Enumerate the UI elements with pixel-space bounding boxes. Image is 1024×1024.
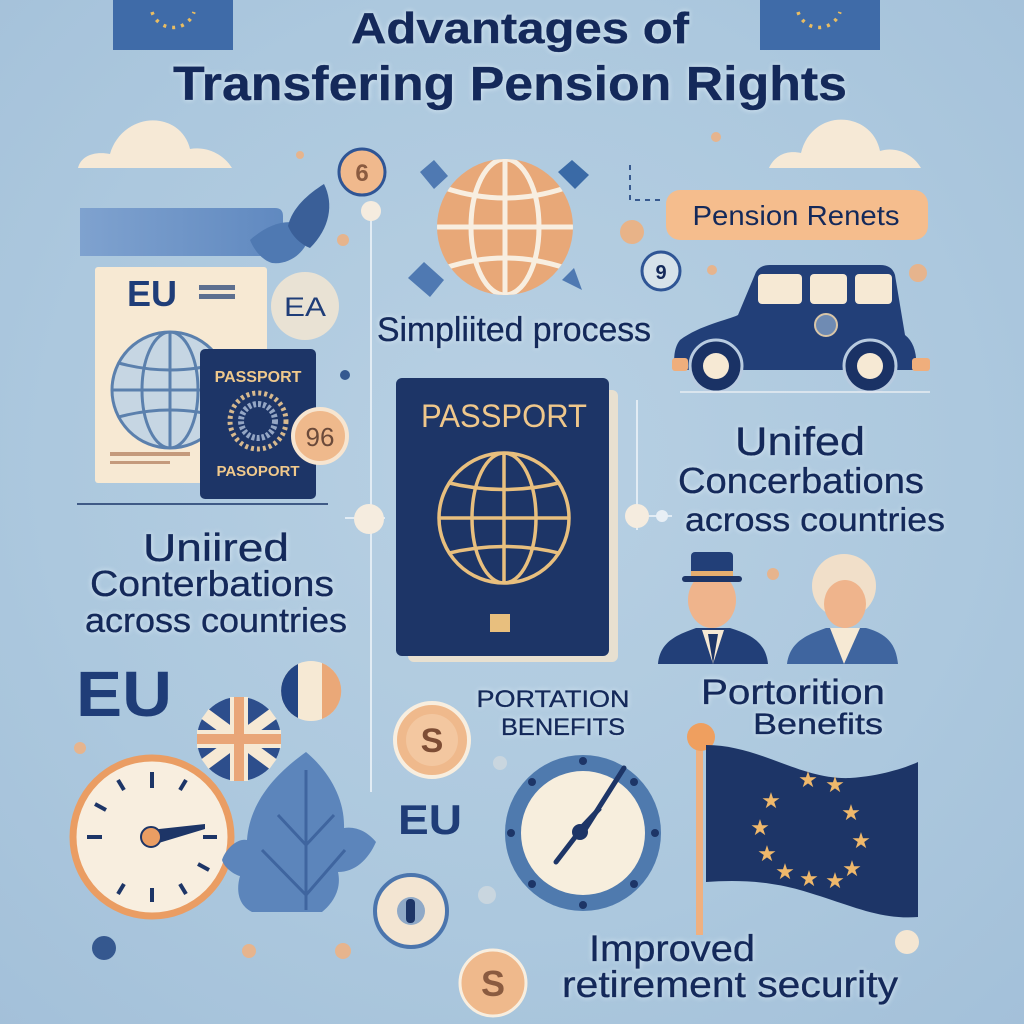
text: unified contributions right (678, 420, 945, 538)
small passport (200, 349, 316, 499)
icon: maple leaf (222, 752, 376, 912)
icon: central globe (435, 155, 575, 300)
leaf decoration (250, 184, 329, 263)
icon: clock left (73, 758, 231, 916)
coin: 96: 96 (306, 422, 334, 452)
dotted path (630, 165, 665, 200)
flag: top right (760, 0, 880, 50)
text: portation benefits: BENEFITS (501, 714, 625, 741)
text: simplified process: Simpliited process (377, 311, 651, 349)
button: pension benefits: Pension Renets (692, 200, 900, 231)
cloud: right (769, 120, 921, 168)
text: portorition benefits: Portorition (701, 673, 885, 712)
coin small (620, 220, 644, 244)
man in hat (658, 552, 768, 664)
icon: UK flag (197, 697, 281, 781)
icon: EU flag with pole: ★ (841, 800, 861, 825)
text: unified contributions left: Uniired (143, 527, 289, 570)
icon: EU flag with pole: ★ (825, 868, 845, 893)
decorative small marks (74, 132, 927, 959)
icon: clock centre (505, 755, 661, 911)
icon: EU flag with pole: ★ (799, 866, 819, 891)
cloud: left (78, 120, 232, 168)
icon: EU flag with pole (687, 723, 918, 935)
text: improved retirement security: retirement security (562, 964, 899, 1005)
icon: car (672, 265, 930, 392)
coin: top centre (339, 149, 385, 195)
icon: EU flag with pole: ★ (757, 841, 777, 866)
icon: EU flag with pole: ★ (825, 772, 845, 797)
small passport: PASSPORT (215, 369, 302, 386)
text: improved retirement security (562, 928, 899, 1005)
document header banner (80, 208, 283, 256)
title: Advantages of (351, 4, 689, 53)
panel: central passport (396, 378, 618, 662)
panel: EU document (77, 184, 347, 504)
small passport: PASOPORT (216, 463, 300, 480)
text: unified contributions left: across countries (85, 602, 347, 640)
text: portation benefits: PORTATION (476, 686, 630, 713)
wheels (690, 340, 896, 392)
icon: EU flag with pole: ★ (750, 815, 770, 840)
icon: EU flag with pole: ★ (842, 856, 862, 881)
text: portorition benefits (701, 673, 885, 741)
node dots on connector (354, 201, 668, 534)
button: pension benefits (666, 190, 928, 240)
text: portation benefits (476, 686, 630, 741)
label: EU large: EU (76, 658, 172, 730)
chip (490, 614, 510, 632)
passport label: PASSPORT (421, 398, 587, 434)
icon: tricolor badge (281, 661, 341, 721)
text: unified contributions right: across countries (685, 501, 945, 538)
coin outline (642, 252, 680, 290)
EU label: EU (127, 273, 177, 314)
connector lines (345, 215, 672, 792)
icon: EU flag with pole: ★ (775, 859, 795, 884)
text: portorition benefits: Benefits (753, 708, 883, 741)
EEA badge (271, 272, 339, 340)
woman (787, 554, 898, 664)
coin: bottom: S (481, 963, 505, 1004)
text: improved retirement security: Improved (589, 928, 755, 969)
document sheet (95, 267, 267, 483)
icon: two retirees (658, 552, 898, 664)
coin: bottom (460, 950, 526, 1016)
label: EU small: EU (398, 796, 462, 843)
text: unified contributions left: Conterbations (90, 563, 334, 604)
title: Transfering Pension Rights (173, 58, 847, 111)
icon: EU flag with pole: ★ (798, 767, 818, 792)
icon: EU flag with pole: ★ (851, 828, 871, 853)
flag: top left (113, 0, 233, 50)
coin: 96 (293, 409, 347, 463)
text: unified contributions right: Concerbations (678, 460, 924, 501)
coin outline: 9 (655, 262, 667, 284)
small cubes around globe (408, 160, 589, 297)
coin: centre lower: S (421, 722, 443, 760)
EEA badge: EA (284, 292, 326, 322)
icon: target badge (375, 875, 447, 947)
passport globe (435, 450, 575, 590)
text: unified contributions right: Unifed (735, 420, 865, 464)
document globe (110, 330, 213, 450)
title (173, 4, 847, 111)
text: unified contributions left (85, 527, 347, 640)
coin: centre lower (395, 703, 469, 777)
icon: EU flag with pole: ★ (761, 788, 781, 813)
coin: top centre: 6 (355, 160, 369, 187)
